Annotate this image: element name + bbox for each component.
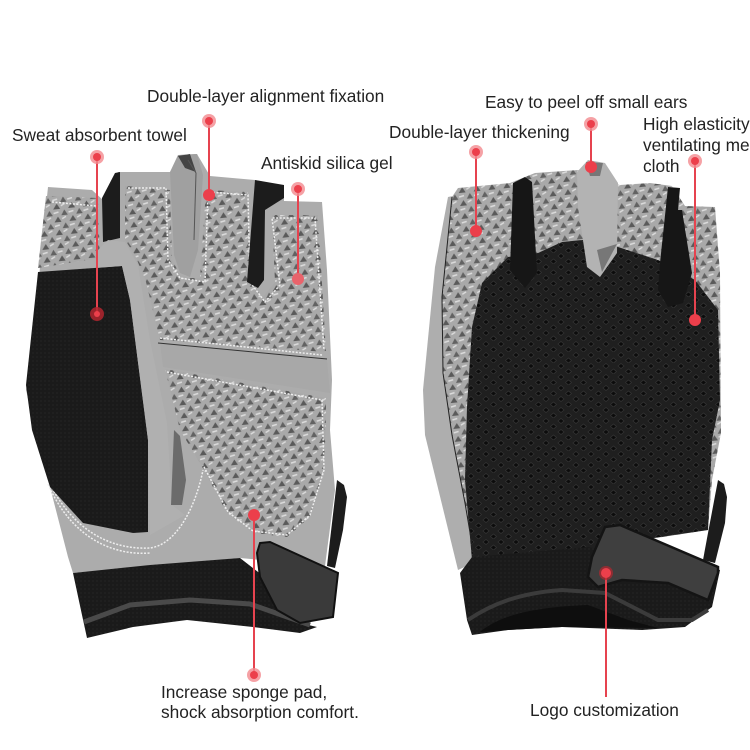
callout: antiskid silica gel xyxy=(261,153,393,285)
left strap xyxy=(257,542,338,623)
callout: easy to peel off small ears xyxy=(485,92,688,173)
callout: double-layer alignment fixation: Double-layer alignment fixation xyxy=(147,86,384,106)
right wrist cuff opening xyxy=(480,605,658,632)
left glove xyxy=(26,154,347,638)
right glove seam xyxy=(442,197,475,562)
right finger loop xyxy=(577,160,618,277)
right glove suede edge xyxy=(423,195,480,570)
callout: easy to peel off small ears: Easy to peel off small ears xyxy=(485,92,688,112)
callout: double-layer alignment fixation xyxy=(147,86,384,201)
thumb shadow xyxy=(171,430,186,505)
left glove palm base xyxy=(26,154,335,573)
callout: increase sponge pad xyxy=(161,509,359,722)
callout: increase sponge pad: Increase sponge pad, xyxy=(161,682,327,702)
right glove xyxy=(423,160,727,635)
callout: high elasticity ventilating mesh cloth: High elasticity xyxy=(643,114,750,134)
left strap tab xyxy=(327,480,347,568)
callout: high elasticity ventilating mesh cloth xyxy=(643,114,750,326)
callout: increase sponge pad: shock absorption comfort. xyxy=(161,702,359,722)
right glove mesh grip xyxy=(442,170,721,565)
callout: antiskid silica gel: Antiskid silica gel xyxy=(261,153,393,173)
sweat towel patch xyxy=(26,266,148,533)
right wrist piping xyxy=(468,590,708,620)
left glove palm band xyxy=(160,343,330,393)
left wrist band xyxy=(73,558,317,638)
thumb strip xyxy=(96,240,185,535)
right strap xyxy=(588,525,718,600)
callout: sweat absorbent towel xyxy=(12,125,187,321)
right glove black mesh xyxy=(465,240,720,560)
callout: double-layer thickening: Double-layer thickening xyxy=(389,122,570,142)
left glove mesh grip area xyxy=(38,186,326,352)
right finger gap 2 xyxy=(658,187,692,307)
right finger gap 1 xyxy=(510,177,537,288)
right strap tab xyxy=(703,480,727,563)
callout: high elasticity ventilating mesh cloth: cloth xyxy=(643,156,680,176)
left glove black finger gaps xyxy=(102,172,284,288)
left glove stitching xyxy=(48,188,324,553)
callout: sweat absorbent towel: Sweat absorbent towel xyxy=(12,125,187,145)
callout: double-layer thickening xyxy=(389,122,570,237)
callout: logo customization xyxy=(530,566,679,720)
right finger loop fold xyxy=(586,162,617,272)
left glove lower palm pad xyxy=(165,369,326,537)
right wrist band xyxy=(460,547,720,635)
left glove finger loop xyxy=(170,154,203,277)
callout: logo customization: Logo customization xyxy=(530,700,679,720)
